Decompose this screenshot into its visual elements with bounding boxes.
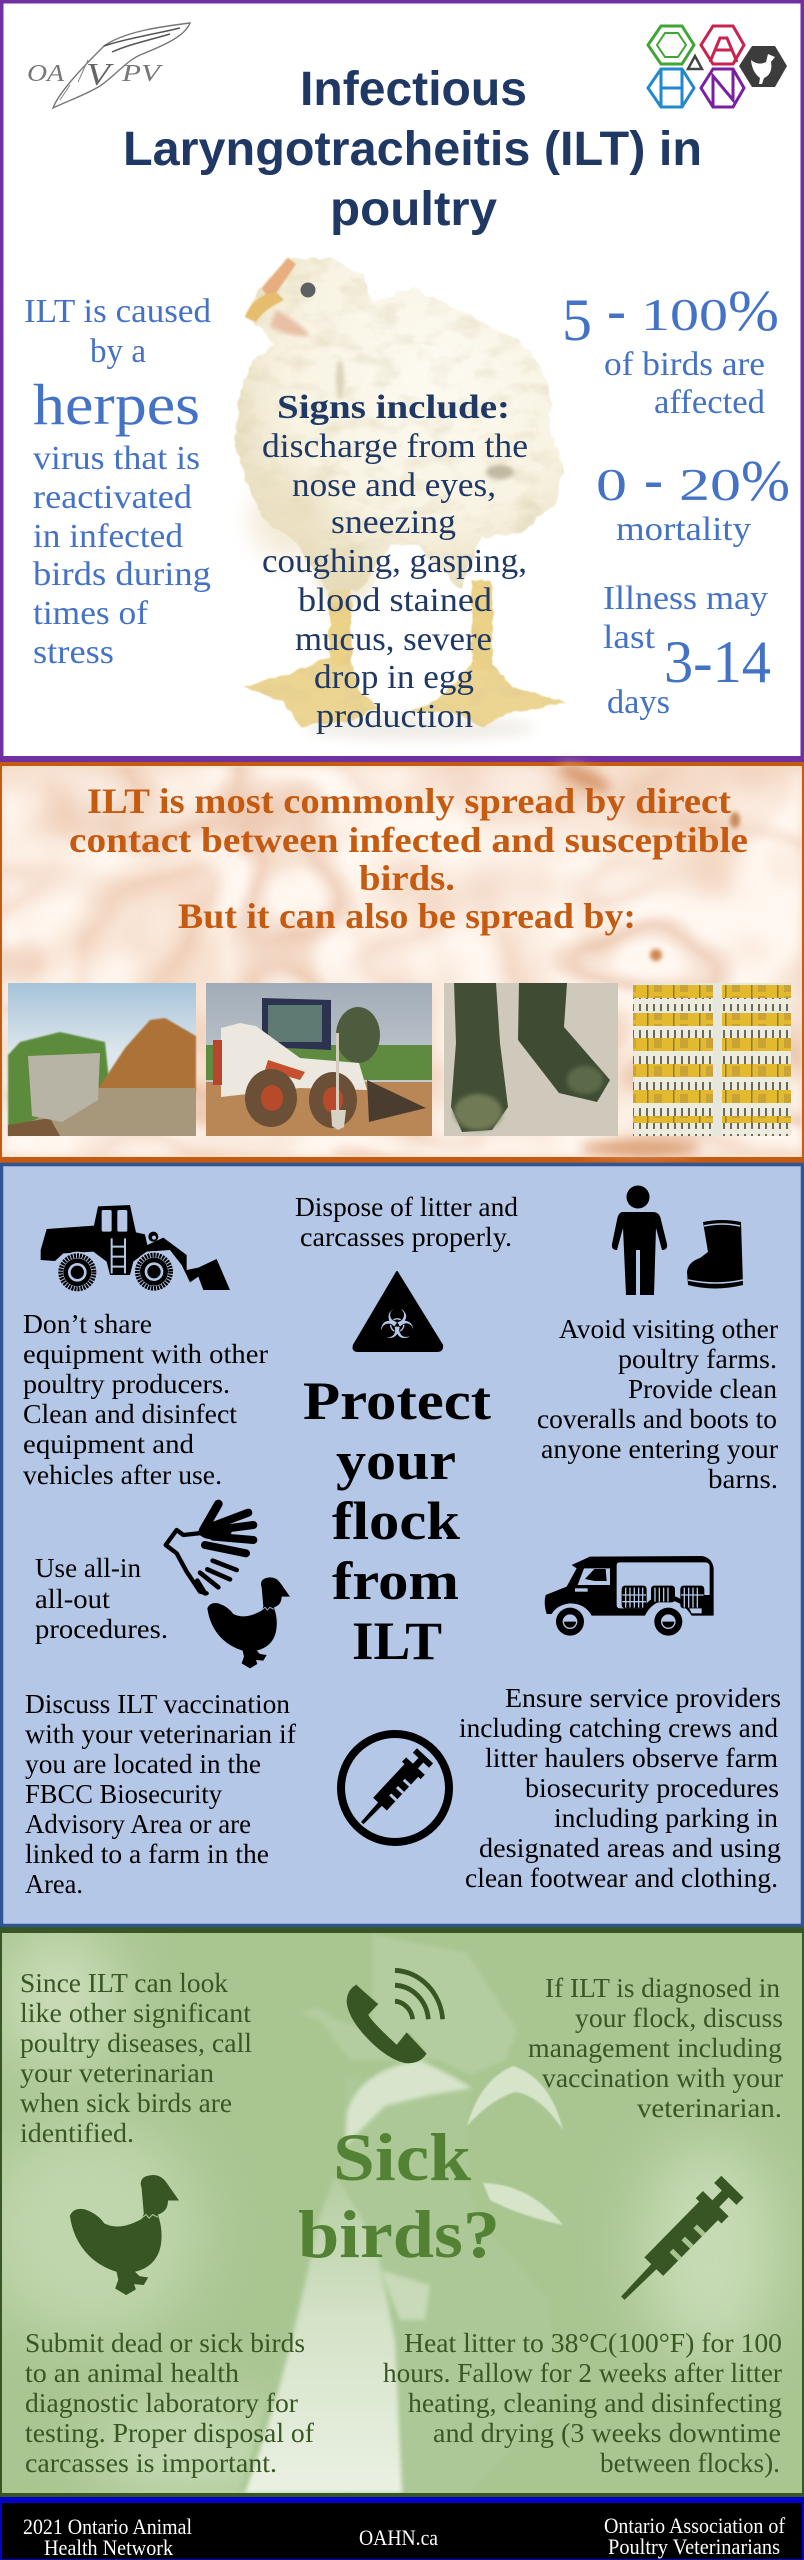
text: avoid visiting: anyone entering your [541, 1434, 778, 1464]
top border of footer [0, 2497, 804, 2503]
footer text: OAHN credit: Health Network [44, 2535, 173, 2560]
text: spread heading: ILT is most commonly spread by direct [87, 781, 731, 821]
text: since ILT: when sick birds are [20, 2088, 232, 2118]
text block: ILT cause: ILT is caused [24, 293, 211, 330]
text: don't share equipment [23, 1309, 268, 1490]
heading: sick birds [298, 2119, 500, 2272]
icon: hen [207, 1577, 290, 1668]
icon: boot [687, 1220, 743, 1288]
text: heat litter: hours. Fallow for 2 weeks after litter [383, 2358, 782, 2388]
text: don't share equipment: vehicles after use. [23, 1460, 222, 1490]
green background with rooster [2, 1933, 802, 2493]
icon: phone [347, 1970, 443, 2063]
text block: statistics: last [603, 619, 656, 656]
text: avoid visiting [537, 1314, 778, 1494]
text: all-in all-out: all-out [35, 1584, 111, 1614]
text: service providers [459, 1683, 781, 1893]
footer text: OAHN credit: 2021 Ontario Animal [23, 2514, 192, 2539]
footer background [1, 2499, 803, 2560]
text block: signs [262, 389, 528, 735]
text block: statistics: - [644, 446, 663, 512]
text block: statistics: 0 [596, 460, 627, 510]
text: discuss vaccination: linked to a farm in the [25, 1839, 269, 1869]
text: submit birds [25, 2328, 314, 2478]
text block: statistics: of birds are [604, 346, 765, 383]
icon: wheel loader [41, 1205, 230, 1293]
text: discuss vaccination: Discuss ILT vaccination [25, 1689, 290, 1719]
text: spread heading [69, 781, 748, 936]
text: if diagnosed: veterinarian. [637, 2093, 782, 2123]
text: since ILT [20, 1968, 252, 2148]
protect background [2, 1164, 802, 1926]
text: submit birds: Submit dead or sick birds [25, 2328, 305, 2358]
text: since ILT: your veterinarian [20, 2058, 215, 2088]
spread panel border [0, 762, 804, 1163]
text: since ILT: poultry diseases, call [20, 2028, 252, 2058]
text: if diagnosed [528, 1973, 783, 2123]
text block: signs: coughing, gasping, [262, 543, 527, 580]
icon: OAPV quill logo: OA [27, 61, 64, 87]
title: Infectious [300, 63, 527, 116]
text block: statistics: 100 [641, 290, 728, 340]
text block: signs: Signs include: [277, 389, 510, 426]
icon: poultry truck [545, 1556, 714, 1639]
photo: manure pile [8, 983, 196, 1136]
heading: protect your flock: ILT [352, 1611, 442, 1671]
text: dispose [295, 1192, 518, 1252]
panel: overview [0, 2, 804, 762]
icon: OAPV quill logo: V [86, 56, 114, 92]
text: service providers: including parking in [554, 1803, 779, 1833]
panel: how ILT spreads [0, 758, 804, 1163]
icon: OAHN hexagon logo [648, 26, 787, 107]
photo: chick crates [633, 983, 791, 1136]
text block: ILT cause: stress [33, 634, 114, 671]
icon: person [612, 1186, 667, 1295]
text: since ILT: Since ILT can look [20, 1968, 229, 1998]
text block: statistics [562, 277, 790, 721]
text: avoid visiting: Avoid visiting other [559, 1314, 778, 1344]
text block: signs: blood stained [298, 582, 492, 619]
text block: signs: mucus, severe [295, 621, 492, 658]
text block: ILT cause: birds during [33, 556, 211, 593]
text block: statistics: mortality [616, 511, 751, 548]
text: submit birds: testing. Proper disposal of [25, 2418, 314, 2448]
text block: signs: production [316, 698, 473, 735]
text: if diagnosed: If ILT is diagnosed in [545, 1973, 781, 2003]
text block: signs: discharge from the [262, 428, 528, 465]
text: discuss vaccination: with your veterinarian if [25, 1719, 296, 1749]
heading: protect your flock: flock [332, 1491, 460, 1551]
text block: statistics: affected [654, 384, 765, 421]
text: don't share equipment: Clean and disinfect [23, 1399, 238, 1429]
text: don't share equipment: poultry producers. [23, 1369, 230, 1399]
text: submit birds: diagnostic laboratory for [25, 2388, 298, 2418]
text: don't share equipment: equipment and [23, 1429, 195, 1459]
text: discuss vaccination [25, 1689, 296, 1899]
footer text: OAPV credit: Poultry Veterinarians [608, 2534, 780, 2559]
panel: protect your flock [2, 1164, 802, 1926]
text block: ILT cause: virus that is [33, 440, 200, 477]
icon: OAPV quill logo [27, 23, 190, 108]
text: avoid visiting: poultry farms. [618, 1344, 777, 1374]
footer text: OAPV credit [604, 2513, 786, 2559]
title: poultry [330, 183, 497, 236]
text: dispose: carcasses properly. [300, 1222, 512, 1252]
text: heat litter: and drying (3 weeks downtime [433, 2418, 781, 2448]
text: since ILT: like other significant [20, 1998, 252, 2028]
heading: protect your flock [303, 1371, 491, 1671]
footer text: OAHN credit [23, 2514, 192, 2560]
marble texture [2, 758, 802, 1157]
text: dispose: Dispose of litter and [295, 1192, 518, 1222]
text: if diagnosed: your flock, discuss [575, 2003, 783, 2033]
photo: skid steer [206, 983, 432, 1136]
text: heat litter: heating, cleaning and disinfecting [408, 2388, 782, 2418]
text block: statistics: 5 [562, 287, 592, 353]
text block: statistics: % [728, 278, 779, 343]
text: discuss vaccination: FBCC Biosecurity [25, 1779, 222, 1809]
text block: signs: drop in egg [314, 659, 474, 696]
sick birds border [0, 1927, 804, 2497]
text: service providers: Ensure service providers [505, 1683, 781, 1713]
text: spread heading: But it can also be spread by: [178, 896, 636, 936]
text: service providers: litter haulers observe farm [485, 1743, 778, 1773]
icon: syringe in circle [341, 1734, 449, 1842]
text: heat litter: Heat litter to 38°C(100°F) for 100 [404, 2328, 782, 2358]
text block: statistics: % [741, 448, 790, 513]
text: submit birds: carcasses is important. [25, 2448, 277, 2478]
footer text: OAPV credit: Ontario Association of [604, 2513, 786, 2538]
text: service providers: biosecurity procedures [525, 1773, 779, 1803]
text: discuss vaccination: Advisory Area or are [25, 1809, 251, 1839]
text: heat litter [383, 2328, 782, 2478]
heading: sick birds: birds? [298, 2196, 500, 2272]
title [123, 63, 702, 236]
heading: sick birds: Sick [333, 2119, 471, 2195]
text: service providers: designated areas and using [479, 1833, 781, 1863]
text: don't share equipment: equipment with other [23, 1339, 268, 1369]
footer text: website: OAHN.ca [359, 2525, 438, 2550]
overview background [2, 2, 802, 758]
text: discuss vaccination: Area. [25, 1869, 83, 1899]
icon: biohazard triangle: ☣ [379, 1302, 415, 1348]
text: all-in all-out [35, 1553, 168, 1644]
text: if diagnosed: management including [528, 2033, 782, 2063]
text: service providers: clean footwear and clothing. [465, 1863, 778, 1893]
text: service providers: including catching crews and [459, 1713, 778, 1743]
icon: hen silhouette [70, 2175, 179, 2295]
icon: gloves [166, 1504, 253, 1593]
text block: ILT cause: times of [33, 595, 149, 632]
text: avoid visiting: barns. [708, 1464, 778, 1494]
photo: rubber boots [444, 983, 618, 1136]
text block: statistics: days [607, 684, 670, 721]
heading: protect your flock: Protect [303, 1371, 491, 1431]
text: heat litter: between flocks). [600, 2448, 780, 2478]
text: spread heading: contact between infected and susceptible [69, 820, 748, 860]
text: if diagnosed: vaccination with your [542, 2063, 783, 2093]
text: discuss vaccination: you are located in the [25, 1749, 261, 1779]
title: Laryngotracheitis (ILT) in [123, 123, 702, 176]
text block: statistics: Illness may [603, 580, 768, 617]
text: don't share equipment: Don’t share [23, 1309, 152, 1339]
text: avoid visiting: coveralls and boots to [537, 1404, 777, 1434]
text block: ILT cause [24, 293, 211, 671]
text: spread heading: birds. [359, 858, 455, 898]
icon: biohazard triangle [354, 1272, 442, 1351]
text block: statistics: - [607, 277, 626, 343]
icon: large syringe [610, 2174, 745, 2311]
heading: protect your flock: from [332, 1551, 459, 1611]
text: all-in all-out: procedures. [35, 1614, 168, 1644]
text block: statistics: 3-14 [664, 629, 771, 695]
text block: signs: sneezing [331, 504, 456, 541]
text: since ILT: identified. [20, 2118, 134, 2148]
icon: OAPV quill logo: PV [121, 61, 163, 87]
image: white chicken [235, 258, 568, 740]
text block: signs: nose and eyes, [292, 467, 496, 504]
text block: statistics: 20 [679, 460, 741, 510]
text block: ILT cause: herpes [33, 372, 200, 437]
text block: ILT cause: in infected [33, 518, 183, 555]
panel: sick birds [0, 1927, 804, 2500]
text: all-in all-out: Use all-in [35, 1553, 141, 1583]
heading: protect your flock: your [336, 1431, 456, 1491]
text: submit birds: to an animal health [25, 2358, 240, 2388]
text block: ILT cause: reactivated [33, 479, 192, 516]
text block: ILT cause: by a [90, 333, 146, 370]
text: avoid visiting: Provide clean [628, 1374, 777, 1404]
bottom border of overview [0, 756, 804, 762]
panel: footer [0, 2497, 804, 2560]
